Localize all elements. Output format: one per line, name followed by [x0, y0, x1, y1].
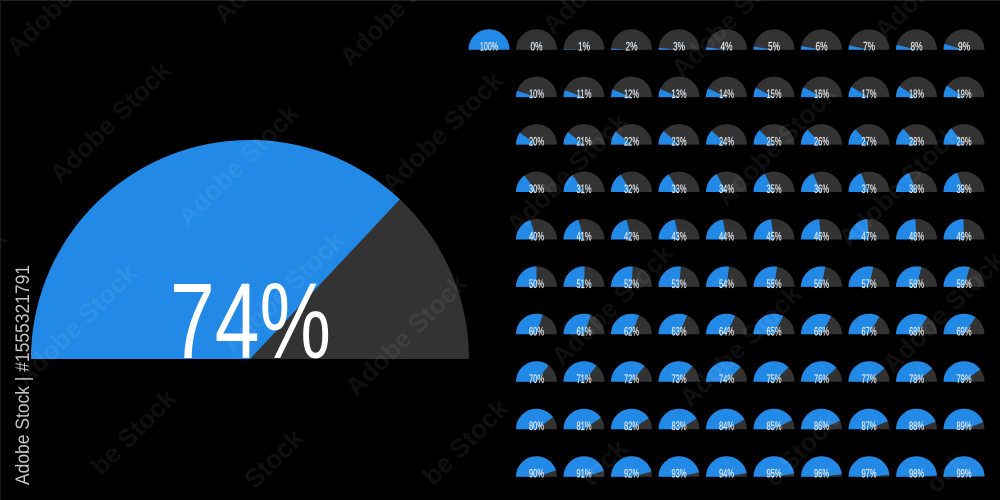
gauge 93% — [658, 456, 700, 481]
gauge 59%: 59% — [957, 277, 972, 291]
gauge 54%: 54% — [719, 277, 734, 291]
gauge 7% — [848, 29, 890, 54]
watermark pattern: Adobe Stock — [43, 55, 177, 189]
gauge 43% — [658, 219, 700, 244]
watermark pattern: Adobe Stock — [709, 78, 843, 212]
gauge 28% — [896, 124, 937, 149]
gauge 86%: 86% — [814, 419, 829, 433]
gauge 25% — [754, 124, 794, 149]
gauge 88% — [896, 409, 937, 433]
gauge 4% — [706, 29, 747, 54]
gauge 35%: 35% — [767, 182, 782, 196]
gauge 89% — [944, 409, 984, 433]
gauge 82% — [611, 409, 652, 433]
gauge 42%: 42% — [624, 230, 639, 244]
gauge 1%: 1% — [578, 40, 590, 54]
gauge 98% — [896, 456, 937, 481]
gauge 21%: 21% — [577, 135, 592, 149]
gauge 16%: 16% — [814, 87, 829, 101]
gauge 19%: 19% — [957, 87, 972, 101]
gauge 20% — [516, 124, 557, 149]
gauge 72% — [611, 361, 652, 386]
gauge 63%: 63% — [672, 324, 687, 338]
watermark pattern: be Stock — [84, 383, 183, 481]
gauge 49% — [944, 219, 984, 244]
gauge 39% — [944, 172, 984, 196]
gauge 67% — [848, 314, 890, 338]
gauge 78%: 78% — [909, 372, 924, 386]
gauge 19% — [944, 77, 984, 101]
gauge 17% — [848, 77, 890, 101]
gauge 7%: 7% — [863, 40, 875, 54]
gauge 23% — [658, 124, 700, 149]
gauge 15% — [754, 77, 794, 101]
gauge 18% — [896, 77, 937, 101]
gauge 72%: 72% — [624, 372, 639, 386]
gauge 63% — [658, 314, 700, 338]
gauge 33%: 33% — [672, 182, 687, 196]
large gauge value: 74% — [170, 260, 331, 381]
gauge 38%: 38% — [909, 182, 924, 196]
gauge 79% — [944, 361, 984, 386]
gauge 11% — [564, 77, 604, 101]
gauge 64%: 64% — [719, 324, 734, 338]
gauge 90%: 90% — [529, 467, 544, 481]
gauge 62%: 62% — [624, 324, 639, 338]
gauge 74%: 74% — [719, 372, 734, 386]
gauge 35% — [754, 172, 794, 196]
gauge 8%: 8% — [910, 40, 923, 54]
gauge 51%: 51% — [577, 277, 592, 291]
watermark pattern: Adobe Stock — [171, 98, 305, 232]
gauge 87%: 87% — [862, 419, 877, 433]
gauge 31% — [564, 172, 604, 196]
gauge 3% — [658, 29, 700, 54]
gauge 85% — [754, 409, 794, 433]
gauge 96%: 96% — [814, 467, 829, 481]
gauge 57% — [848, 266, 890, 291]
gauge 52% — [611, 266, 652, 291]
gauge 85%: 85% — [767, 419, 782, 433]
gauge 26% — [801, 124, 842, 149]
gauge 75%: 75% — [767, 372, 782, 386]
gauge 87% — [848, 409, 890, 433]
gauge 76% — [801, 361, 842, 386]
gauge 18%: 18% — [909, 87, 924, 101]
watermark pattern: be Stock — [416, 393, 515, 491]
gauge 49%: 49% — [957, 230, 972, 244]
gauge 58% — [896, 266, 937, 291]
gauge 13%: 13% — [672, 87, 687, 101]
gauge 17%: 17% — [862, 87, 877, 101]
gauge 92%: 92% — [624, 467, 639, 481]
gauge 31%: 31% — [577, 182, 592, 196]
gauge 56%: 56% — [814, 277, 829, 291]
gauge 47%: 47% — [862, 230, 877, 244]
large gauge blue fill — [31, 140, 400, 359]
gauge 15%: 15% — [767, 87, 782, 101]
gauge 50%: 50% — [529, 277, 544, 291]
gauge 34%: 34% — [719, 182, 734, 196]
gauge 91% — [564, 456, 604, 481]
gauge 96% — [801, 456, 842, 481]
gauge 77%: 77% — [862, 372, 877, 386]
gauge 77% — [848, 361, 890, 386]
gauge 95%: 95% — [767, 467, 782, 481]
watermark pattern: Adobe Stock — [216, 225, 350, 359]
watermark pattern: Adobe Stock — [339, 268, 473, 402]
gauge 71%: 71% — [577, 372, 592, 386]
gauge 73%: 73% — [672, 372, 687, 386]
gauge 48% — [896, 219, 937, 244]
gauge 81% — [564, 409, 604, 433]
gauge 61% — [564, 314, 604, 338]
gauge 82%: 82% — [624, 419, 639, 433]
gauge 10% — [516, 77, 557, 101]
gauge 41%: 41% — [577, 230, 592, 244]
gauge 38% — [896, 172, 937, 196]
gauge 76%: 76% — [814, 372, 829, 386]
gauge 48%: 48% — [909, 230, 924, 244]
gauge 46% — [801, 219, 842, 244]
gauge 60%: 60% — [529, 324, 544, 338]
gauge 11%: 11% — [577, 87, 592, 101]
gauge 42% — [611, 219, 652, 244]
gauge 81%: 81% — [577, 419, 592, 433]
gauge 16% — [801, 77, 842, 101]
gauge 86% — [801, 409, 842, 433]
gauge 53% — [658, 266, 700, 291]
gauge 68%: 68% — [909, 324, 924, 338]
gauge 59% — [944, 266, 984, 291]
watermark pattern: Adobe Stock — [500, 106, 634, 240]
gauge 43%: 43% — [672, 230, 687, 244]
gauge 10%: 10% — [529, 87, 544, 101]
gauge 22% — [611, 124, 652, 149]
gauge 29% — [944, 124, 984, 149]
gauge 90% — [516, 456, 557, 481]
large gauge: 74% — [31, 140, 469, 381]
gauge 79%: 79% — [957, 372, 972, 386]
gauge 14%: 14% — [719, 87, 734, 101]
gauge 98%: 98% — [909, 467, 924, 481]
watermark pattern: Adobe Stock — [832, 119, 966, 253]
gauge 92% — [611, 456, 652, 481]
gauge 47% — [848, 219, 890, 244]
gauge 45%: 45% — [767, 230, 782, 244]
gauge 3%: 3% — [673, 40, 685, 54]
gauge 8% — [896, 29, 937, 54]
gauge 0% — [516, 29, 557, 54]
gauge 83% — [658, 409, 700, 433]
gauge 44% — [706, 219, 747, 244]
gauge 36%: 36% — [814, 182, 829, 196]
gauge 46%: 46% — [814, 230, 829, 244]
gauge 24%: 24% — [719, 135, 734, 149]
gauge 94% — [706, 456, 747, 481]
gauge 97% — [848, 456, 890, 481]
gauge 44%: 44% — [719, 230, 734, 244]
gauge 9% — [944, 29, 984, 54]
gauge 71% — [564, 361, 604, 386]
gauge 27%: 27% — [862, 135, 877, 149]
gauge 40% — [516, 219, 557, 244]
gauge 30%: 30% — [529, 182, 544, 196]
gauge 68% — [896, 314, 937, 338]
gauge 99% — [944, 456, 984, 481]
gauge 84% — [706, 409, 747, 433]
gauge 61%: 61% — [577, 324, 592, 338]
gauge 25%: 25% — [767, 135, 782, 149]
gauge 67%: 67% — [862, 324, 877, 338]
watermark pattern: tock — [574, 433, 634, 492]
gauge 6%: 6% — [816, 40, 828, 54]
gauge 13% — [658, 77, 700, 101]
gauge 45% — [754, 219, 794, 244]
gauge 100% — [468, 29, 510, 54]
gauge 40%: 40% — [529, 230, 544, 244]
gauge 9%: 9% — [958, 40, 970, 54]
gauge 80% — [516, 409, 557, 433]
gauge 53%: 53% — [672, 277, 687, 291]
gauge 14% — [706, 77, 747, 101]
gauge 1% — [564, 29, 604, 54]
gauge 97%: 97% — [862, 467, 877, 481]
gauge 94%: 94% — [719, 467, 734, 481]
gauge 4%: 4% — [720, 40, 733, 54]
gauge 41% — [564, 219, 604, 244]
gauge 89%: 89% — [957, 419, 972, 433]
gauge 84%: 84% — [719, 419, 734, 433]
gauge 12%: 12% — [624, 87, 639, 101]
gauge 80%: 80% — [529, 419, 544, 433]
gauge 20%: 20% — [529, 135, 544, 149]
gauge 83%: 83% — [672, 419, 687, 433]
gauge 34% — [706, 172, 747, 196]
watermark pattern: ock — [919, 446, 973, 499]
gauge 26%: 26% — [814, 135, 829, 149]
gauge 33% — [658, 172, 700, 196]
gauge 95% — [754, 456, 794, 481]
gauge 75% — [754, 361, 794, 386]
gauge 65%: 65% — [767, 324, 782, 338]
gauge 36% — [801, 172, 842, 196]
gauge 50% — [516, 266, 557, 291]
gauge 37% — [848, 172, 890, 196]
gauge 93%: 93% — [672, 467, 687, 481]
gauge 54% — [706, 266, 747, 291]
gauge 60% — [516, 314, 557, 338]
gauge 73% — [658, 361, 700, 386]
gauge 52%: 52% — [624, 277, 639, 291]
gauge 65% — [754, 314, 794, 338]
gauge 66%: 66% — [814, 324, 829, 338]
gauge 39%: 39% — [957, 182, 972, 196]
gauge 6% — [801, 29, 842, 54]
gauge 51% — [564, 266, 604, 291]
gauge 22%: 22% — [624, 135, 639, 149]
watermark pattern: Adobe Stock — [545, 238, 679, 372]
gauge 100%: 100% — [480, 40, 498, 54]
gauge 37%: 37% — [862, 182, 877, 196]
gauge 0%: 0% — [530, 40, 543, 54]
gauge 69%: 69% — [957, 324, 972, 338]
gauge 29%: 29% — [957, 135, 972, 149]
gauge 57%: 57% — [862, 277, 877, 291]
gauge 55%: 55% — [767, 277, 782, 291]
gauge grid: small percentage gauges — [468, 29, 984, 481]
watermark pattern: Adobe Stock — [9, 258, 143, 392]
gauge 28%: 28% — [909, 135, 924, 149]
gauge 2%: 2% — [626, 40, 638, 54]
gauge 74% — [706, 361, 747, 386]
watermark pattern: Adobe Stock — [375, 65, 509, 199]
gauge 55% — [754, 266, 794, 291]
gauge 62% — [611, 314, 652, 338]
gauge 2% — [611, 29, 652, 54]
gauge 24% — [706, 124, 747, 149]
gauge 21% — [564, 124, 604, 149]
watermark pattern: Stock — [238, 423, 310, 494]
gauge 70%: 70% — [529, 372, 544, 386]
watermark pattern: Adobe Stock — [673, 279, 807, 413]
gauge 66% — [801, 314, 842, 338]
large gauge track — [31, 140, 469, 359]
gauge 23%: 23% — [672, 135, 687, 149]
gauge 70% — [516, 361, 557, 386]
gauge 12% — [611, 77, 652, 101]
watermark pattern: e Stock — [758, 406, 845, 493]
gauge 56% — [801, 266, 842, 291]
gauge 27% — [848, 124, 890, 149]
gauge 58%: 58% — [909, 277, 924, 291]
gauge 88%: 88% — [909, 419, 924, 433]
gauge 64% — [706, 314, 747, 338]
gauge 32% — [611, 172, 652, 196]
gauge 5% — [754, 29, 794, 54]
gauge 99%: 99% — [957, 467, 972, 481]
vertical stock id caption: Adobe Stock | #1555321791 — [13, 265, 34, 485]
gauge 69% — [944, 314, 984, 338]
gauge 32%: 32% — [624, 182, 639, 196]
gauge 30% — [516, 172, 557, 196]
gauge 91%: 91% — [577, 467, 592, 481]
gauge 78% — [896, 361, 937, 386]
gauge 5%: 5% — [768, 40, 780, 54]
